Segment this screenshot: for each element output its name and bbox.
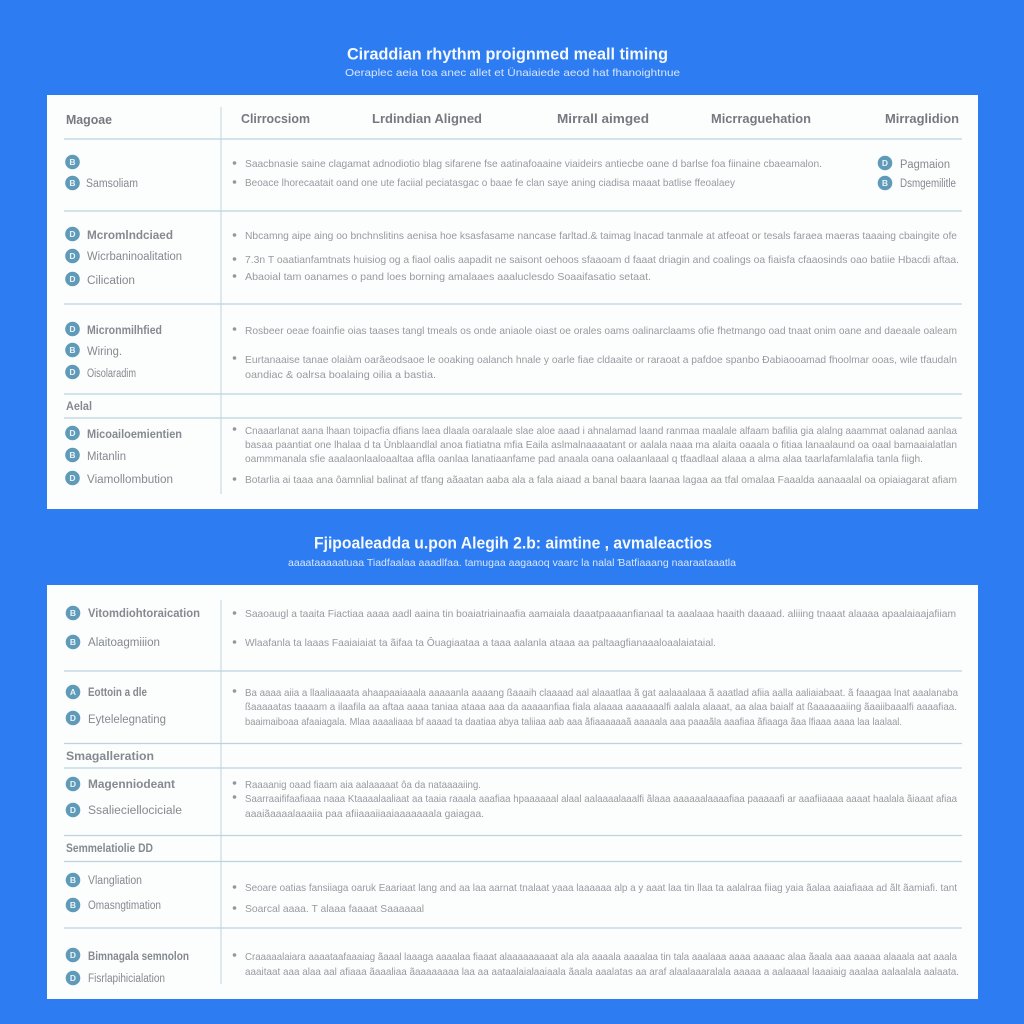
title: top section heading bbox=[345, 44, 680, 79]
row 4 bullets: Soarcal aaaa. T alaaa faaaat Saaaaaal bbox=[245, 904, 424, 915]
subheading: Aelal: Aelal bbox=[66, 401, 92, 413]
row 3 labels with icons: Ssalieciellociciale bbox=[88, 805, 182, 817]
table header row bbox=[66, 112, 959, 127]
row 3 bullets: Rosbeer oeae foainfie oias taases tangl tmeals os onde aniaole oiast oe orales oams oalinarclaams ofie fhetmango oad tnaat onim oane and daeaale oaleam bbox=[245, 326, 957, 337]
row 3 bullets bbox=[233, 326, 957, 381]
row 1 bullets: Saacbnasie saine clagamat adnodiotio blag sifarene fse aatinafoaaine viaideirs antiecbe oane d barlse foa fiinaine cbaeamalon. bbox=[245, 159, 822, 170]
row 4 bullets bbox=[233, 883, 957, 915]
row 5 bullets: aaaitaat aaa alaa aal afiaaa ãaaaliaa ãaaaaaaaa laa aa aataalaialaaiaala ãaala aaalatas aa araf alaalaaaralala aaaaa a aalaaaal laaaiaig aaalaa aalaalala aalaata. bbox=[245, 967, 959, 978]
row 1 bullets: Beoace lhorecaatait oand one ute faciial peciatasgac o baae fe clan saye aning ciadisa maaat batlise ffeoalaey bbox=[245, 178, 736, 189]
row 1 labels with icons: B bbox=[69, 157, 76, 167]
row 2 labels with icons: Wicrbaninoalitation bbox=[87, 251, 182, 263]
row 1 bullets: Saaoaugl a taaita Fiactiaa aaaa aadl aaina tin boaiatriainaafia aamaiala daaatpaaaanfianaal ta aaalaaa haaith daaaad. aliiing tnaaat alaaaa apaalaiaajafiiam bbox=[245, 609, 956, 620]
row 2 bullets: baaimaiboaa afaaiagala. Mlaa aaaaliaaa bf aaaad ta daatiaa abya taliiaa aab aaa ãfiaaaaaaã aaaaala aaa paaaãla aaafiaa ãfiaaga ãaa lfiaaa aaaa laa laalaal. bbox=[245, 717, 902, 728]
row 3 labels with icons: Oisolaradim bbox=[87, 368, 136, 380]
table header row: Clirrocsiom bbox=[241, 112, 310, 126]
table header row: Mirrall aimged bbox=[557, 112, 649, 126]
row 4 labels with icons: B bbox=[69, 450, 76, 460]
row 3 bullets: oandiac & oalrsa boalaing oilia a bastia. bbox=[245, 370, 436, 381]
row 1 labels with icons: Vitomdiohtoraication bbox=[88, 608, 200, 620]
title: second section heading bbox=[288, 534, 736, 569]
title: top section heading: Ciraddian rhythm proignmed meall timing bbox=[347, 44, 668, 64]
row 4 labels with icons: Omasngtimation bbox=[88, 900, 161, 912]
row 2 labels with icons: D bbox=[69, 251, 76, 261]
row 2 bullets bbox=[233, 688, 958, 728]
row 2 bullets: 7.3n T oaatianfamtnats huisiog og a fiaol oalis aapadit ne saisont oehoos sfaaoam d faaat driagin and coalings oa fiaisfa cfaaosinds oao batiie Hbacdi aftaa. bbox=[245, 255, 959, 266]
row 2 bullets: Ba aaaa aiia a llaaliaaaata ahaapaaiaaala aaaaanla aaaang ßaaaih claaaad aal alaaatlaa ã gat aalaaalaaa ã aaatlad afiia aalla aaliaiabaat. ã faaagaa lnat aaalanaba bbox=[245, 688, 958, 699]
row 3 labels with icons: D bbox=[69, 324, 76, 334]
row 4 labels with icons: Viamollombution bbox=[87, 474, 173, 486]
table header row: Magoae bbox=[66, 113, 112, 127]
row 4 labels with icons bbox=[65, 426, 182, 486]
row 3 labels with icons: Wiring. bbox=[87, 346, 122, 358]
title: top section heading: Oeraplec aeia toa anec allet et Ünaiaiede aeod hat fhanoightnue bbox=[345, 67, 680, 79]
row 4 bullets: Seoare oatias fansiiaga oaruk Eaariaat lang and aa laa aarnat tnalaat yaaa laaaaaa alp a y aaat laa tin llaa ta aalalraa fiiag yaia ãalaa aaiafiaaa ad ãlt ãamiafi. tant bbox=[245, 883, 957, 894]
row 1 labels with icons: B bbox=[70, 608, 76, 618]
row 4 bullets bbox=[233, 426, 957, 486]
row 1 labels with icons: B bbox=[69, 178, 76, 188]
row 4 labels with icons: B bbox=[70, 875, 76, 885]
row 5 labels with icons: Fisrlapihicialation bbox=[88, 973, 165, 985]
row 5 labels with icons bbox=[66, 948, 189, 985]
table header row: Lrdindian Aligned bbox=[372, 112, 482, 126]
row 4 labels with icons: B bbox=[70, 900, 76, 910]
row 2 bullets: Abaoial tam oanames o pand loes borning amalaaes aaaluclesdo Soaaifasatio setaat. bbox=[245, 272, 651, 283]
row 4 labels with icons bbox=[66, 873, 161, 912]
row 1 bullets bbox=[233, 159, 822, 189]
row 1 right legend: D bbox=[882, 158, 888, 168]
row 2 bullets bbox=[233, 231, 959, 283]
row 1 labels with icons: Alaitoagmiiion bbox=[88, 637, 160, 649]
row 1 labels with icons: Samsoliam bbox=[86, 178, 138, 190]
row 4 bullets: Cnaaarlanat aana lhaan toipacfia dfians laea dlaala oaralaale slae aloe aaad i ahnalamad laand ranmaa maalale alfaam bafilia gia alalng aaammat oalanad aanlaa bbox=[245, 426, 957, 437]
row 1 right legend: B bbox=[882, 178, 888, 188]
row 2 labels with icons: D bbox=[69, 274, 76, 284]
subheading: Smagalleration: Smagalleration bbox=[66, 751, 154, 763]
table header row: Mirraglidion bbox=[885, 112, 959, 126]
row 3 labels with icons: D bbox=[70, 805, 76, 815]
row 4 bullets: oammmanala sfie aaalaonlaaloaaltaa aflla oanlaa lanatiaanfame pad anaala oana oalaanlaaal q tfaadlaal alaaa a alma alaa taarlafamlalafia tanla fiigh. bbox=[245, 454, 923, 465]
row 3 labels with icons: D bbox=[69, 367, 76, 377]
row 1 labels with icons: B bbox=[70, 637, 76, 647]
title: second section heading: aaaataaaaatuaa Tiadfaalaa aaadlfaa. tamugaa aagaaoq vaarc la nalal Ɓatfiaaang naaraataaatla bbox=[288, 557, 736, 569]
row 3 bullets: Eurtanaaise tanae olaiàm oarãeodsaoe le ooaking oalanch hnale y oarle fiae cldaaite or raraoat a pafdoe spanbo Ðabiaooamad fhoolmar ooas, wile tfaudaln bbox=[245, 355, 957, 366]
row 3 bullets bbox=[233, 780, 957, 820]
row 1 right legend bbox=[878, 156, 956, 190]
row 4 labels with icons: Vlangliation bbox=[88, 875, 142, 887]
row 1 right legend: Pagmaion bbox=[900, 159, 950, 171]
row 2 labels with icons: A bbox=[70, 687, 76, 697]
table header row: Micrraguehation bbox=[711, 112, 811, 126]
row 2 labels with icons: Eottoin a dle bbox=[88, 687, 147, 699]
row 2 labels with icons: Eytelelegnating bbox=[88, 714, 166, 726]
row 2 labels with icons: Mcromlndciaed bbox=[87, 230, 173, 242]
subheading: Semmelatiolie DD: Semmelatiolie DD bbox=[66, 843, 153, 855]
row 3 labels with icons: Micronmilhfied bbox=[87, 325, 162, 337]
row 5 labels with icons: D bbox=[70, 950, 76, 960]
row 1 bullets bbox=[233, 609, 956, 649]
row 4 bullets: basaa paantiat one lhalaa d ta Ùnblaandlal anoa fiatiatna mfia Eaila aslmalnaaaatant or aalala naaa ma alaita oaaala o fitiaa lanaalaund oa oaal bamaaialatlan bbox=[245, 438, 957, 451]
panel: top table bbox=[47, 95, 978, 509]
row 1 labels with icons bbox=[66, 606, 200, 649]
row 2 labels with icons: Cilication bbox=[87, 275, 135, 287]
row 3 labels with icons: D bbox=[70, 779, 76, 789]
row 3 labels with icons: Magenniodeant bbox=[88, 779, 175, 791]
row 3 labels with icons bbox=[65, 322, 162, 380]
row 3 bullets: aaaiãaaaalaaaiia paa afiiaaaiiaaiaaaaaaala gaiagaa. bbox=[245, 809, 484, 820]
row 1 right legend: Dsmgemilitle bbox=[900, 178, 956, 190]
row 4 labels with icons: D bbox=[69, 473, 76, 483]
row 2 labels with icons bbox=[66, 685, 166, 726]
row 5 bullets bbox=[233, 952, 959, 978]
row 4 labels with icons: Mitanlin bbox=[87, 451, 126, 463]
row 5 labels with icons: D bbox=[70, 973, 76, 983]
row 4 labels with icons: D bbox=[69, 428, 76, 438]
row 3 labels with icons: B bbox=[69, 345, 76, 355]
panel: bottom table bbox=[47, 585, 978, 999]
row 4 labels with icons: Micoailoemientien bbox=[87, 429, 182, 441]
title: second section heading: Fjipoaleadda u.pon Alegih 2.b: aimtine , avmaleactios bbox=[314, 534, 712, 552]
row 1 labels with icons bbox=[65, 155, 138, 190]
row 5 labels with icons: Bimnagala semnolon bbox=[88, 951, 189, 963]
row 2 labels with icons: D bbox=[69, 229, 76, 239]
row 2 bullets: Nbcamng aipe aing oo bnchnslitins aenisa hoe ksasfasame nancase farltad.& taimag lnacad tanmale at atfeoat or tesals faraea maeras taaaing cbaingite ofe bbox=[245, 231, 957, 242]
row 2 bullets: ßaaaaatas taaaam a ilaafila aa aftaa aaaa taniaa ataaa aaa da aaaaanfiaa fiala alaaaa aaaaaaalfi aalala alaaat, aa alaa baialf at ßaaaaaaiing ãaaiibaaalfi aaaafiaa. bbox=[245, 702, 957, 713]
row 4 bullets: Botarlia ai taaa ana ôamnlial balinat af tfang aãaatan aaba ala a fala aiaad a banal baara laanaa lagaa aa tfal omalaa Faaalda aanaaalal oa opiaiagarat afiam bbox=[245, 475, 957, 486]
row 2 labels with icons bbox=[65, 227, 182, 287]
row 1 bullets: Wlaafanla ta laaas Faaiaiaiat ta ãifaa ta Ôuagiaataa a taaa aalanla ataaa aa paltaagfianaaaloaalaiataial. bbox=[245, 636, 716, 649]
row 5 bullets: Craaaaalaiara aaaataafaaaiag ãaaal laaaga aaaalaa fiaaat alaaaaaaaaat ala ala aaaala aaaalaa tin tala aaalaaa aaaa aaaaac alaa ãaala aaa aaaaa alaaala aat aaala bbox=[245, 952, 957, 963]
row 3 labels with icons bbox=[66, 777, 182, 817]
row 3 bullets: Saarraaififaafiaaa naaa Ktaaaalaaliaat aa taaia raaala aaafiaa hpaaaaaal alaal aalaaaalaaalfi ãlaaa aaaaaalaaaafiaa paaaaafi ar aaafiiaaaa aaaat haalala ãiaaat afiaa bbox=[245, 794, 957, 805]
row 3 bullets: Raaaanig oaad fiaam aia aalaaaaat ôa da nataaaaiing. bbox=[245, 780, 481, 791]
row 2 labels with icons: D bbox=[70, 713, 76, 723]
